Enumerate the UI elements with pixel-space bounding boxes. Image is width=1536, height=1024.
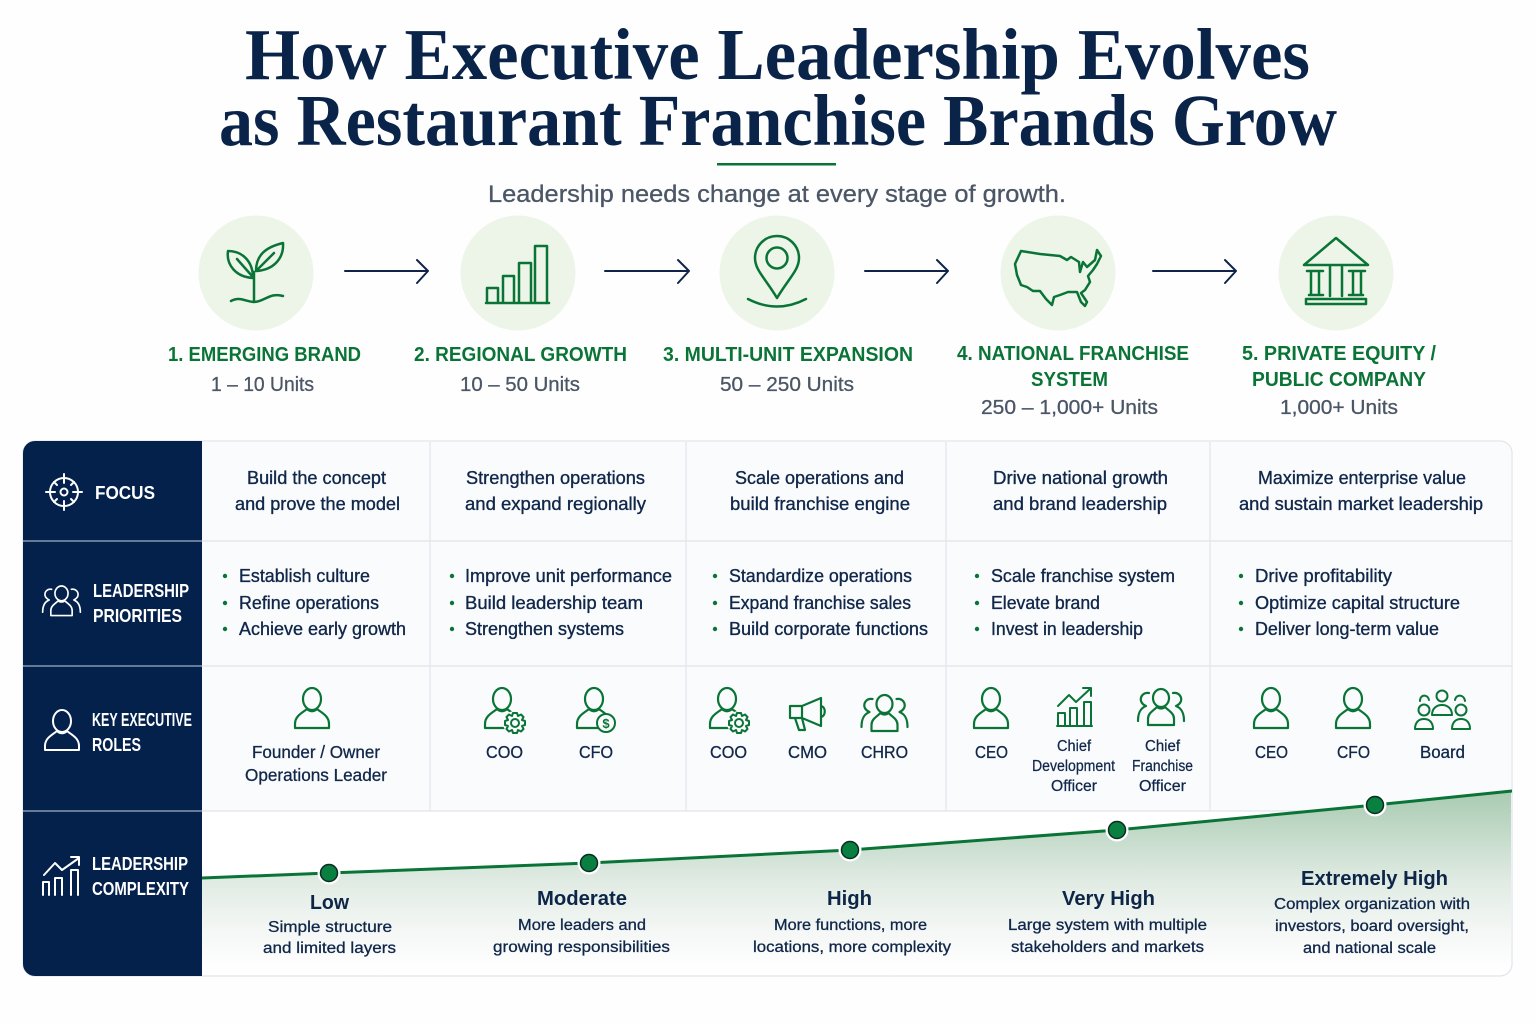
complexity: moderate xyxy=(493,888,670,956)
role: CHRO xyxy=(861,695,908,762)
role: CEO: CEO xyxy=(975,742,1008,762)
focus row: Scale operations and xyxy=(735,468,904,488)
role: founder xyxy=(245,688,387,785)
focus row xyxy=(235,468,1483,514)
icon: map pin xyxy=(748,236,806,306)
role: chief development officer: Officer xyxy=(1051,778,1097,795)
leadership priorities row: Scale franchise system xyxy=(991,566,1175,586)
complexity: high xyxy=(753,888,951,956)
leadership priorities row: Build leadership team xyxy=(465,593,643,613)
leadership priorities row: Build corporate functions xyxy=(729,619,928,639)
stage 4 label xyxy=(957,343,1189,391)
role: COO xyxy=(485,688,527,762)
role: CFO: CFO xyxy=(1337,742,1370,762)
title xyxy=(219,14,1337,161)
leadership priorities row: Drive profitability xyxy=(1255,566,1392,586)
arrow xyxy=(345,260,428,283)
complexity: very high: Very High xyxy=(1062,888,1155,910)
row header: leadership priorities xyxy=(43,581,189,626)
complexity: low: Low xyxy=(310,892,349,914)
leadership priorities row: Expand franchise sales xyxy=(729,593,911,613)
row header: leadership priorities: LEADERSHIP xyxy=(93,581,189,601)
leadership priorities row: Optimize capital structure xyxy=(1255,593,1460,613)
role: CEO: CEO xyxy=(1255,742,1288,762)
row header: leadership priorities: PRIORITIES xyxy=(93,606,182,626)
role: CEO xyxy=(1254,688,1288,762)
title: How Executive Leadership Evolves xyxy=(245,14,1310,95)
role: CFO: CFO xyxy=(579,742,613,762)
leadership priorities row: Establish culture xyxy=(239,566,370,586)
arrow xyxy=(865,260,948,283)
row header: key executive roles: ROLES xyxy=(92,735,141,755)
row header: leadership complexity xyxy=(43,854,189,899)
title: as Restaurant Franchise Brands Grow xyxy=(219,80,1337,161)
stage 5 label: PUBLIC COMPANY xyxy=(1252,369,1427,391)
role: CFO xyxy=(1336,688,1370,762)
role: COO: COO xyxy=(710,742,747,762)
focus row: Build the concept xyxy=(247,468,386,488)
stage 5 label: 5. PRIVATE EQUITY / xyxy=(1242,343,1436,365)
row header: leadership complexity: LEADERSHIP xyxy=(92,854,188,874)
complexity: low: and limited layers xyxy=(263,940,396,957)
complexity: moderate: More leaders and xyxy=(518,917,646,934)
focus row: and prove the model xyxy=(235,494,400,514)
key executive roles row xyxy=(245,688,1470,795)
stage 4 units: 250 – 1,000+ Units xyxy=(981,397,1158,419)
leadership priorities row: Achieve early growth xyxy=(239,619,406,639)
arrow xyxy=(1153,260,1236,283)
role: CEO xyxy=(974,688,1008,762)
row header column xyxy=(23,441,202,976)
complexity: extremely high xyxy=(1274,868,1470,957)
stage 4 label: SYSTEM xyxy=(1031,369,1108,391)
complexity: moderate: Moderate xyxy=(537,888,627,910)
leadership priorities row: Standardize operations xyxy=(729,566,912,586)
leadership priorities row: Deliver long-term value xyxy=(1255,619,1439,639)
complexity: extremely high: and national scale xyxy=(1303,940,1436,957)
role: COO xyxy=(710,688,751,762)
stage 2: regional growth xyxy=(414,216,627,366)
role: chief development officer: Chief xyxy=(1057,738,1092,755)
complexity: high: More functions, more xyxy=(774,917,927,934)
complexity: extremely high: investors, board oversight, xyxy=(1275,918,1469,935)
complexity: very high xyxy=(1008,888,1207,956)
focus row: Drive national growth xyxy=(993,468,1168,488)
stage 1 label: 1. EMERGING BRAND xyxy=(168,344,361,366)
stage 3: multi-unit expansion xyxy=(663,216,913,366)
icon: bars xyxy=(486,246,549,303)
comparison table xyxy=(23,441,1512,976)
focus row: and brand leadership xyxy=(993,494,1167,514)
role: CFO: $ xyxy=(602,716,610,731)
stage 3 label: 3. MULTI-UNIT EXPANSION xyxy=(663,344,913,366)
role: CFO xyxy=(577,688,615,762)
row header: key executive roles: KEY EXECUTIVE xyxy=(92,710,192,730)
role: chief franchise officer xyxy=(1132,689,1193,795)
role: founder: Operations Leader xyxy=(245,765,387,785)
role: CMO: CMO xyxy=(788,742,827,762)
icon: institution xyxy=(1304,238,1368,304)
focus row: build franchise engine xyxy=(730,494,910,514)
role: chief franchise officer: Franchise xyxy=(1132,758,1193,775)
icon: sprout xyxy=(228,243,283,302)
focus row: Strengthen operations xyxy=(466,468,645,488)
leadership priorities row: Refine operations xyxy=(239,593,379,613)
role: board xyxy=(1415,690,1470,762)
role: chief development officer: Development xyxy=(1032,758,1116,775)
focus row: and expand regionally xyxy=(465,494,646,514)
stage 3 units: 50 – 250 Units xyxy=(720,374,854,396)
role: COO: COO xyxy=(486,742,523,762)
stage 5 label xyxy=(1242,343,1436,391)
complexity: moderate: growing responsibilities xyxy=(493,939,670,956)
stage 1 units: 1 – 10 Units xyxy=(211,374,314,396)
leadership priorities row: Strengthen systems xyxy=(465,619,624,639)
focus row: and sustain market leadership xyxy=(1239,494,1483,514)
complexity: high: locations, more complexity xyxy=(753,939,951,956)
row header: key executive roles xyxy=(45,710,192,755)
role: board: Board xyxy=(1420,742,1465,762)
stage 1: emerging brand xyxy=(168,216,361,366)
complexity: low: Simple structure xyxy=(268,919,392,936)
stage 4: national franchise system xyxy=(957,216,1189,391)
complexity: high: High xyxy=(827,888,872,910)
role: CMO xyxy=(788,698,827,762)
leadership priorities row: Improve unit performance xyxy=(465,566,672,586)
complexity markers xyxy=(318,794,1386,884)
focus row: Maximize enterprise value xyxy=(1258,468,1466,488)
stage 5 units: 1,000+ Units xyxy=(1280,397,1398,419)
complexity chart xyxy=(202,791,1512,975)
role: chief franchise officer: Chief xyxy=(1145,738,1181,755)
stage 2 units: 10 – 50 Units xyxy=(460,374,580,396)
complexity: extremely high: Complex organization with xyxy=(1274,896,1470,913)
leadership priorities row xyxy=(223,566,1460,639)
complexity: very high: stakeholders and markets xyxy=(1011,939,1204,956)
complexity: very high: Large system with multiple xyxy=(1008,917,1207,934)
stage 5: private equity / public company xyxy=(1242,216,1436,391)
stage 2 label: 2. REGIONAL GROWTH xyxy=(414,344,627,366)
row header: focus xyxy=(46,474,155,510)
complexity: low xyxy=(263,892,396,957)
subtitle: Leadership needs change at every stage of growth. xyxy=(488,181,1066,208)
stage 4 label: 4. NATIONAL FRANCHISE xyxy=(957,343,1189,365)
role: CHRO: CHRO xyxy=(861,742,908,762)
leadership priorities row: Invest in leadership xyxy=(991,619,1143,639)
row header: leadership complexity: COMPLEXITY xyxy=(92,879,189,899)
role: chief franchise officer: Officer xyxy=(1139,778,1186,795)
leadership priorities row: Elevate brand xyxy=(991,593,1100,613)
role: founder: Founder / Owner xyxy=(252,742,380,762)
complexity: extremely high: Extremely High xyxy=(1301,868,1448,890)
role: chief development officer xyxy=(1032,688,1116,795)
icon: USA map xyxy=(1015,250,1101,306)
row header: focus: FOCUS xyxy=(95,483,155,503)
arrow xyxy=(605,260,689,283)
